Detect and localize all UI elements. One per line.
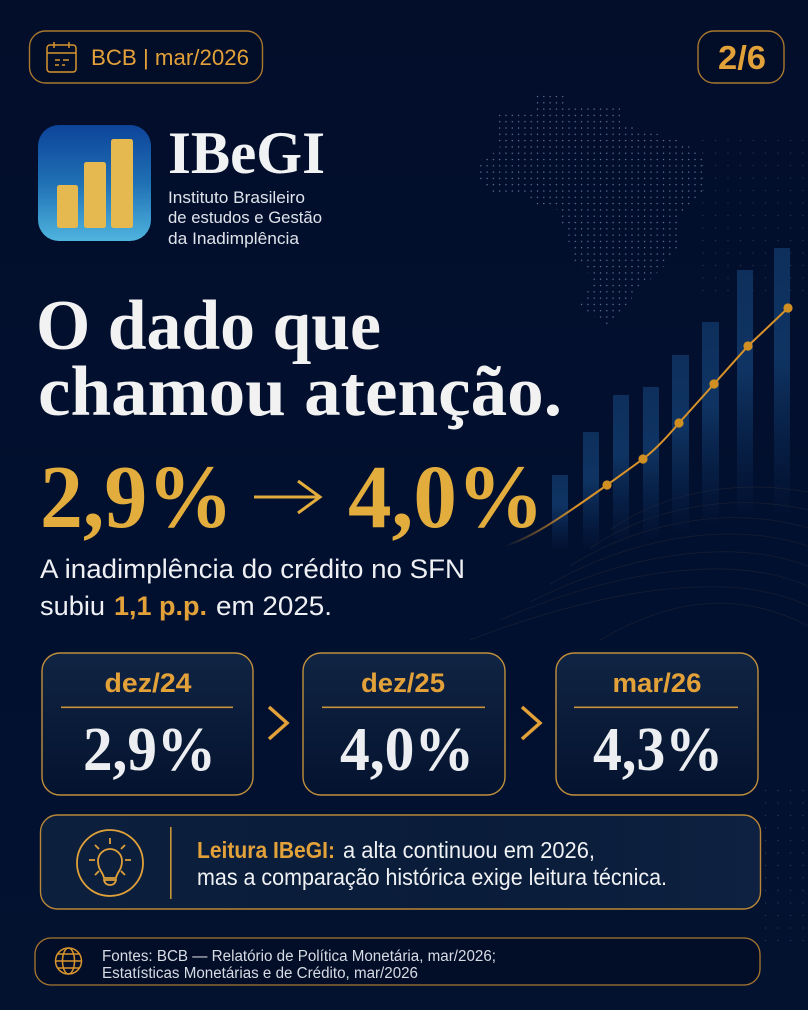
date badge: BCB | mar/2026: [91, 45, 249, 70]
faint dot field lower right: [765, 780, 808, 950]
page badge: [698, 31, 784, 83]
card: mar/26: 4,3%: [593, 716, 723, 784]
callout: Leitura IBeGI: Leitura IBeGI:: [197, 837, 335, 863]
description: subiu: [40, 591, 105, 621]
faint dot field right: [700, 140, 808, 300]
logo wordmark: IBeGI: [168, 120, 325, 186]
card: mar/26: mar/26: [612, 668, 702, 698]
institute name: [168, 189, 322, 248]
card: dez/25: 4,0%: [340, 716, 474, 784]
card: dez/24: 2,9%: [83, 716, 216, 784]
headline numbers: 2,9%: [40, 448, 233, 547]
sources footer: [35, 938, 760, 985]
dotted Brazil map: [480, 96, 702, 324]
title: O dado que: [36, 287, 381, 365]
title: [36, 287, 562, 431]
title: chamou atenção.: [38, 353, 562, 431]
arrow: chevron: [522, 707, 540, 739]
callout: Leitura IBeGI: [40, 815, 760, 909]
headline numbers: 4,0%: [348, 448, 544, 547]
date badge: [30, 31, 262, 83]
description: A inadimplência do crédito no SFN: [40, 554, 465, 584]
description: 1,1 p.p.: [114, 591, 207, 621]
callout: Leitura IBeGI: mas a comparação histórica exige leitura técnica.: [197, 864, 667, 890]
callout: Leitura IBeGI: a alta continuou em 2026,: [343, 837, 595, 863]
sources footer: Fontes: BCB — Relatório de Política Monetária, mar/2026;: [102, 948, 496, 965]
headline numbers: [40, 448, 544, 547]
page badge: 2/6: [718, 39, 766, 76]
arrow: chevron: [269, 707, 287, 739]
description: em 2025.: [216, 591, 332, 621]
card: dez/25: dez/25: [361, 668, 445, 698]
card: dez/25: [303, 653, 505, 795]
card: dez/24: dez/24: [104, 668, 192, 698]
arrow: [254, 481, 320, 513]
faint contour lines: [470, 487, 808, 640]
bar chart background: [552, 248, 790, 552]
institute name: de estudos e Gestão: [168, 209, 322, 227]
icon: calendar: [47, 42, 76, 72]
logo icon: [38, 125, 151, 241]
institute name: Instituto Brasileiro: [168, 189, 305, 207]
rising line with markers: [505, 303, 793, 546]
card: mar/26: [556, 653, 758, 795]
icon: light bulb: [77, 830, 143, 896]
card: dez/24: [42, 653, 253, 795]
institute name: da Inadimplência: [168, 230, 300, 248]
description: [40, 554, 465, 621]
icon: globe: [56, 948, 82, 974]
logo wordmark: [168, 120, 325, 248]
sources footer: Estatísticas Monetárias e de Crédito, mar/2026: [102, 965, 418, 982]
